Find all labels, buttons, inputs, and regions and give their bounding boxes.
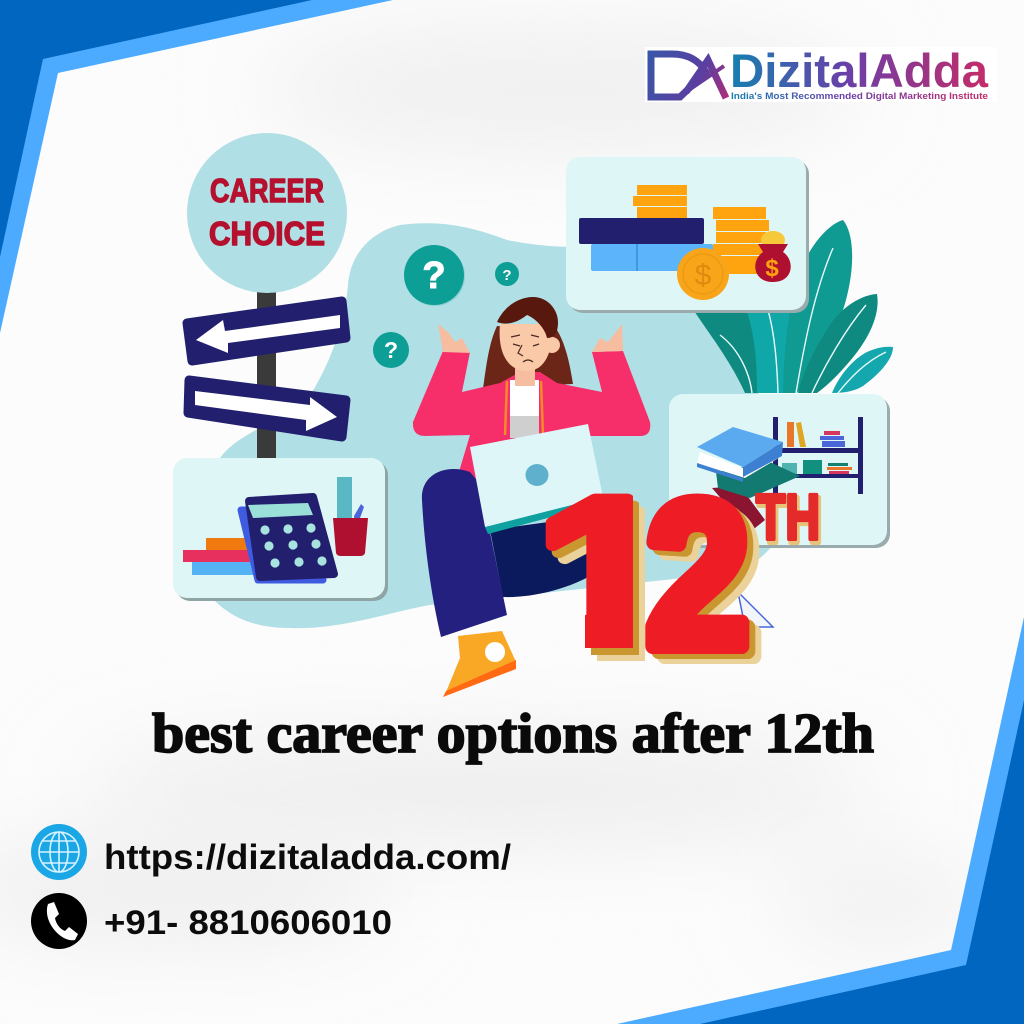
card: money	[566, 157, 809, 313]
illustration blob backdrop	[190, 223, 784, 628]
digit one	[546, 494, 645, 661]
plant leaves	[690, 220, 893, 393]
medium question badge	[373, 332, 409, 368]
sign: right arrow	[188, 380, 346, 437]
money bag: $	[765, 255, 779, 282]
big coin	[677, 248, 729, 300]
icon: phone	[31, 893, 87, 949]
card: bookshelf	[669, 394, 890, 556]
digit one: 1	[536, 455, 673, 687]
large question badge: ?	[422, 255, 446, 297]
TH label: TH	[758, 484, 822, 556]
logo wordmark: DizitalAdda	[730, 44, 989, 97]
shoe	[443, 631, 516, 697]
money bag	[755, 231, 791, 282]
logo plate	[645, 47, 997, 102]
question mark badges	[373, 245, 519, 368]
career choice label	[209, 172, 325, 252]
digit one: 1	[542, 462, 679, 694]
logo	[645, 44, 997, 102]
stacked books	[697, 427, 800, 532]
shirt	[505, 380, 543, 438]
shelf	[773, 417, 863, 494]
big coin: $	[695, 259, 712, 292]
website url: https://dizitaladda.com/	[104, 838, 511, 877]
pen cup	[333, 477, 368, 556]
career choice circle	[187, 133, 347, 293]
small question badge: ?	[502, 267, 512, 284]
title: best career options after 12th	[152, 703, 874, 765]
digit one: 1	[548, 468, 685, 700]
near leg	[422, 469, 507, 637]
phone row	[31, 893, 392, 949]
small question badge	[495, 262, 519, 286]
books under coins	[579, 218, 704, 244]
jacket	[413, 351, 650, 490]
signpost	[187, 133, 347, 463]
hair back	[483, 326, 573, 388]
hair front	[497, 297, 558, 338]
phone number: +91- 8810606010	[104, 904, 392, 942]
medium question badge: ?	[384, 337, 398, 363]
large question badge	[404, 245, 465, 306]
icon: globe	[31, 824, 87, 880]
career choice label: CAREER	[210, 172, 324, 209]
digit two: 2	[658, 469, 762, 700]
card: calculator	[173, 458, 388, 601]
logo tagline: India's Most Recommended Digital Marketing Institute	[731, 91, 988, 102]
stacked books	[183, 538, 254, 575]
website row	[31, 824, 511, 880]
neck and face	[500, 324, 560, 386]
digit two: 2	[646, 459, 750, 690]
hands	[438, 324, 623, 353]
coin stacks	[633, 185, 769, 274]
career choice label: CHOICE	[209, 215, 325, 252]
laptop	[470, 424, 604, 534]
paper sheet behind number	[738, 592, 773, 627]
big 3D number 12	[546, 494, 762, 664]
logo mark	[651, 54, 726, 98]
calculator	[241, 497, 334, 580]
TH label: TH	[756, 481, 820, 553]
shelf items	[782, 422, 852, 474]
post	[257, 285, 276, 463]
sign: left arrow	[187, 301, 346, 361]
person	[413, 297, 650, 697]
far leg	[490, 515, 600, 597]
digit two: 2	[652, 464, 756, 695]
